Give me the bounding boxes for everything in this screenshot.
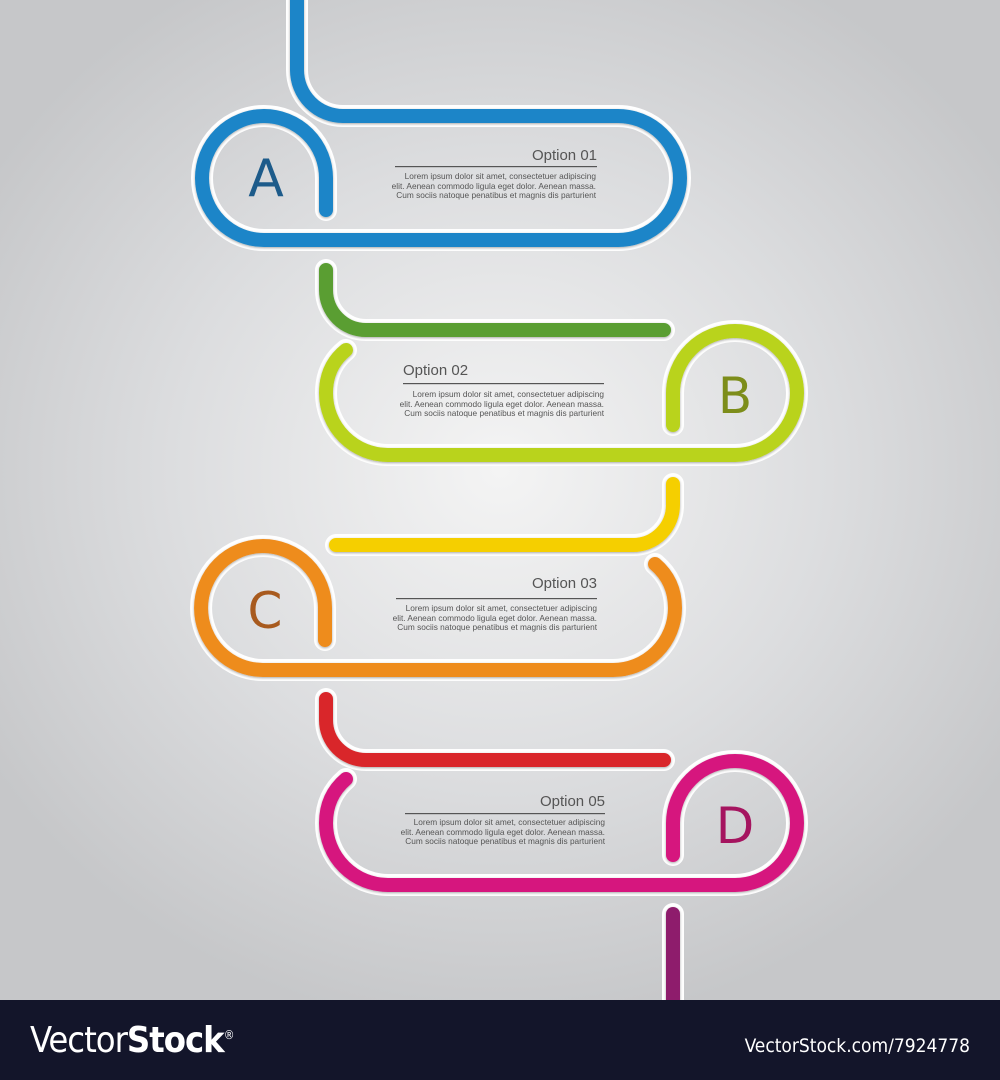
text block 01: Cum sociis natoque penatibus et magnis dis parturient [396,190,597,200]
letter D: D [716,797,754,855]
loop A [202,0,680,240]
loop D [326,761,797,885]
text block 03 [393,575,598,632]
text block 03: Option 03 [532,575,597,592]
text block 01: Option 01 [532,147,597,164]
text block 05 [401,793,606,846]
text block 01: Lorem ipsum dolor sit amet, consectetuer adipiscing [405,171,596,181]
footer [0,1000,1000,1080]
text block 02: elit. Aenean commodo ligula eget dolor. Aenean massa. [400,399,604,409]
loop C [201,546,675,670]
text block 05: Option 05 [540,793,605,810]
text block 03: Lorem ipsum dolor sit amet, consectetuer adipiscing [406,603,597,613]
footer url: VectorStock.com/7924778 [745,1035,970,1057]
text block 03: elit. Aenean commodo ligula eget dolor. Aenean massa. [393,613,597,623]
letter C: C [248,582,282,640]
text block 01 [392,147,597,200]
text block 05: Lorem ipsum dolor sit amet, consectetuer adipiscing [414,817,605,827]
connector red [326,699,664,760]
letter B: B [718,367,752,425]
loop B [326,331,797,455]
tail [662,914,684,1010]
connector yellow [336,484,673,545]
connector green [326,270,664,330]
text block 02: Lorem ipsum dolor sit amet, consectetuer adipiscing [413,389,604,399]
text block 05: Cum sociis natoque penatibus et magnis dis parturient [405,836,606,846]
text block 05: elit. Aenean commodo ligula eget dolor. Aenean massa. [401,827,605,837]
text block 01: elit. Aenean commodo ligula eget dolor. Aenean massa. [392,181,596,191]
letter A: A [248,149,284,209]
text block 02: Option 02 [403,362,468,379]
footer logo: VectorStock® [30,1020,234,1061]
text block 02: Cum sociis natoque penatibus et magnis dis parturient [404,408,605,418]
text block 02 [400,362,605,418]
text block 03: Cum sociis natoque penatibus et magnis dis parturient [397,622,598,632]
